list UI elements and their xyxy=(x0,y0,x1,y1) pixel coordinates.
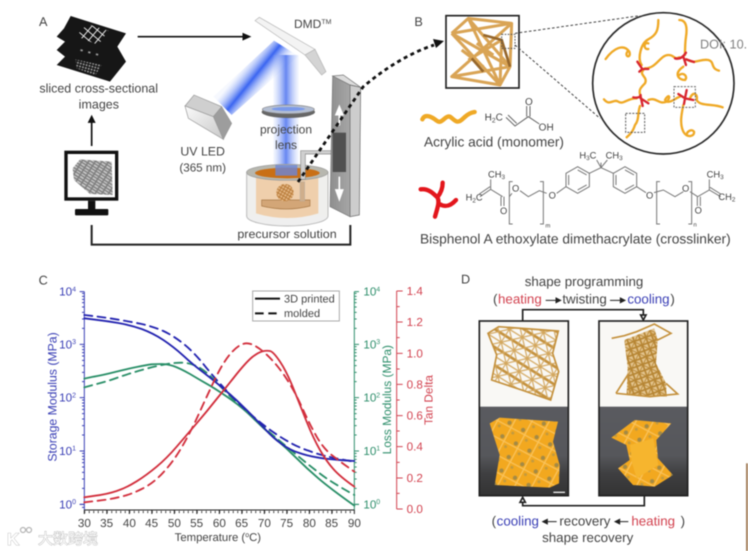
connector: monitor to vat xyxy=(92,225,350,245)
text: programming steps: heating xyxy=(498,292,542,307)
connector: recovery arrow xyxy=(520,496,644,506)
loss modulus tick labels xyxy=(363,285,380,511)
photo panel: twisted lattice xyxy=(599,321,688,496)
temperature tick labels: 30 xyxy=(78,517,91,530)
temperature axis title: C) xyxy=(249,531,261,544)
text: programming steps xyxy=(493,292,675,307)
storage modulus tick labels: 10 xyxy=(59,338,72,351)
curve: tan delta printed xyxy=(84,351,354,497)
curve: storage modulus molded xyxy=(84,315,354,462)
temperature tick labels: 65 xyxy=(235,517,248,530)
zoom guide lines xyxy=(515,16,640,118)
text: programming steps: twisting xyxy=(562,292,607,307)
temperature tick labels: 55 xyxy=(190,517,203,530)
loss modulus tick labels: 10 xyxy=(363,445,376,458)
arrow: stack to DMD xyxy=(138,34,249,39)
icon: down arrow xyxy=(336,177,343,199)
text: projection lens: lens xyxy=(275,138,297,152)
crosslinker structure xyxy=(466,150,735,229)
storage modulus axis title: Storage Modulus (MPa) xyxy=(45,332,59,462)
temperature tick labels: 90 xyxy=(348,517,361,530)
crosslinker structure: 3 xyxy=(619,155,623,162)
edge strip xyxy=(746,463,748,551)
crosslinker structure: CH xyxy=(718,192,732,202)
icon: build platform arm xyxy=(301,151,339,179)
crosslinker structure: n xyxy=(693,221,697,228)
temperature tick labels: 35 xyxy=(100,517,113,530)
icon: projection lens xyxy=(262,105,315,118)
curve: loss modulus molded xyxy=(84,363,354,495)
temperature tick labels: 75 xyxy=(280,517,293,530)
crosslinker structure: O xyxy=(682,183,689,193)
storage modulus tick labels: 1 xyxy=(72,445,76,452)
loss modulus tick labels: 10 xyxy=(363,498,376,511)
text: UV LED: (365 nm) xyxy=(179,161,226,174)
loss modulus tick labels: 0 xyxy=(376,498,380,506)
text: shape programming: shape programming xyxy=(525,274,643,289)
temperature tick labels: 50 xyxy=(168,517,181,530)
tan delta tick labels: 1.4 xyxy=(407,285,423,298)
label D: D xyxy=(461,273,470,287)
storage modulus tick labels: 10 xyxy=(59,445,72,458)
icon: crosslinker shape xyxy=(421,183,456,217)
panel C: DMA chart xyxy=(39,273,435,544)
acrylic acid structure xyxy=(485,96,554,133)
panel B: materials xyxy=(414,13,747,246)
storage modulus tick labels: 10 xyxy=(59,391,72,404)
tan delta tick labels: 0.2 xyxy=(407,472,423,485)
crosslinker structure: O xyxy=(695,205,702,215)
text: shape recovery: shape recovery xyxy=(542,530,633,545)
text: programming steps: cooling xyxy=(627,292,670,307)
label B: B xyxy=(414,15,423,29)
loss modulus tick labels: 2 xyxy=(376,391,380,399)
curve: tan delta molded xyxy=(84,343,354,502)
text: sliced images caption xyxy=(39,81,158,111)
text: precursor solution: precursor solution xyxy=(237,227,337,241)
crosslinker structure: 3 xyxy=(720,174,724,181)
loss modulus tick labels: 10 xyxy=(363,285,376,298)
network magnified view xyxy=(593,13,734,154)
text: projection lens xyxy=(260,122,312,152)
temperature tick labels: 80 xyxy=(303,517,316,530)
crosslinker structure: CH xyxy=(707,169,720,179)
text: recovery steps: heating xyxy=(631,514,675,528)
curve: storage modulus printed xyxy=(84,318,354,461)
temperature axis title: o xyxy=(245,531,249,539)
tan delta axis title: Tan Delta xyxy=(422,375,435,425)
temperature tick labels: 40 xyxy=(123,517,136,530)
loss modulus tick labels: 4 xyxy=(376,285,380,293)
text: DMD: TM xyxy=(321,18,331,26)
acrylic acid structure: OH xyxy=(539,122,554,133)
temperature tick labels: 60 xyxy=(213,517,226,530)
tan delta tick labels: 0.0 xyxy=(407,503,423,516)
icon: computer monitor xyxy=(66,152,117,215)
text: UV LED: UV LED xyxy=(180,145,225,158)
crosslinker structure: 3 xyxy=(501,174,505,181)
panel D: shape memory xyxy=(461,273,748,551)
loss modulus tick labels: 10 xyxy=(363,391,376,404)
tan delta tick labels: 0.4 xyxy=(407,440,423,453)
loss modulus tick labels: 10 xyxy=(363,338,376,351)
crosslinker structure: O xyxy=(512,183,519,193)
arrow: dotted link from printer to unit cell xyxy=(298,45,434,182)
acrylic acid structure: C xyxy=(496,112,503,123)
storage modulus tick labels: 2 xyxy=(72,391,76,399)
text: DOI overlay: DOI: 10. xyxy=(700,38,747,52)
crosslinker structure: CH xyxy=(606,150,619,160)
watermark logo: K xyxy=(7,530,20,549)
crosslinker structure: C xyxy=(590,150,596,160)
temperature tick labels: 85 xyxy=(325,517,338,530)
label C: C xyxy=(39,273,48,287)
monomer chains xyxy=(604,20,723,137)
text: recovery steps: recovery xyxy=(559,514,610,528)
temperature tick labels: 70 xyxy=(258,517,271,530)
text: UV LED xyxy=(179,145,226,174)
watermark logo dots xyxy=(20,528,32,532)
small box on lattice xyxy=(502,34,515,48)
storage modulus axis xyxy=(80,292,84,510)
temperature tick labels: 45 xyxy=(145,517,158,530)
connector: programming arrow xyxy=(523,310,646,321)
text: sliced images caption: sliced cross-sectional xyxy=(39,81,158,95)
loss modulus axis xyxy=(354,292,359,510)
tan delta tick labels: 1.2 xyxy=(407,316,423,329)
tan delta axis xyxy=(397,291,403,509)
icon: resin vat xyxy=(247,164,328,226)
crosslinker structure: 2 xyxy=(472,197,476,204)
text: projection lens: projection xyxy=(260,122,312,136)
crosslinker nodes xyxy=(633,53,694,106)
text: programming steps: ( xyxy=(493,292,498,307)
icon: up arrow xyxy=(336,107,343,125)
crosslinker structure: 2 xyxy=(732,196,735,203)
text: recovery steps: ( xyxy=(492,514,496,528)
legend: molded xyxy=(284,307,320,319)
crosslinker structure: O xyxy=(500,206,507,216)
loss modulus axis title: Loss Modulus (MPa) xyxy=(380,345,394,454)
text: acrylic acid caption: Acrylic acid (monomer) xyxy=(424,134,564,150)
crosslinker structure: C xyxy=(476,192,483,203)
storage modulus tick labels xyxy=(59,285,76,511)
storage modulus tick labels: 3 xyxy=(72,338,76,346)
dashed selection boxes xyxy=(626,113,645,132)
label A: A xyxy=(39,15,48,29)
storage modulus tick labels: 10 xyxy=(59,285,72,298)
temperature axis xyxy=(84,510,354,514)
crosslinker structure: m xyxy=(545,222,550,229)
crosslinker structure: O xyxy=(549,190,556,201)
text: DMD: DMD xyxy=(294,17,321,31)
icon: UV LED xyxy=(185,95,232,139)
crosslinker structure: 3 xyxy=(586,155,590,162)
acrylic acid structure: 2 xyxy=(492,117,496,124)
text: recovery steps xyxy=(492,514,685,528)
tan delta tick labels: 0.6 xyxy=(407,409,423,422)
curves xyxy=(84,315,354,506)
storage modulus tick labels: 4 xyxy=(72,285,76,293)
tan delta tick labels: 1.0 xyxy=(407,347,423,360)
tan delta tick labels xyxy=(407,285,423,516)
watermark text: 大数跨境 xyxy=(38,531,98,548)
text: recovery steps: ) xyxy=(681,514,685,528)
icon: DMD mirror xyxy=(255,17,326,75)
icon: vertical stage xyxy=(330,75,361,217)
curve: loss modulus printed xyxy=(84,364,354,506)
storage modulus tick labels: 0 xyxy=(72,498,76,506)
icon: sliced image stack xyxy=(57,16,126,82)
loss modulus tick labels: 3 xyxy=(376,338,380,346)
arrow: monitor to stack xyxy=(89,117,94,146)
crosslinker structure: CH xyxy=(488,169,501,179)
text: recovery steps: cooling xyxy=(497,514,539,528)
icon: monomer squiggle xyxy=(422,112,475,122)
crosslinker structure: H xyxy=(579,150,586,160)
legend: 3D printed xyxy=(284,293,335,305)
watermark xyxy=(7,528,98,549)
photo panel: original lattice xyxy=(479,321,568,496)
temperature tick labels xyxy=(78,517,361,530)
text: sliced images caption: images xyxy=(79,97,119,111)
storage modulus tick labels: 10 xyxy=(59,498,72,511)
text: crosslinker caption: Bisphenol A ethoxylate dimethacrylate (crosslinker) xyxy=(420,231,731,246)
crosslinker structure: O xyxy=(646,190,653,201)
loss modulus tick labels: 1 xyxy=(376,445,380,452)
icon: unit cell lattice xyxy=(446,16,519,88)
blue light beams xyxy=(213,41,299,177)
panel A: printing setup xyxy=(39,15,361,245)
acrylic acid structure: H xyxy=(485,112,492,123)
crosslinker structure: H xyxy=(466,192,472,203)
temperature axis title: Temperature ( xyxy=(175,531,245,544)
acrylic acid structure: O xyxy=(525,96,533,107)
arrow head xyxy=(433,39,444,48)
text: programming steps: ) xyxy=(670,292,675,307)
legend xyxy=(253,291,339,321)
tan delta tick labels: 0.8 xyxy=(407,378,423,391)
